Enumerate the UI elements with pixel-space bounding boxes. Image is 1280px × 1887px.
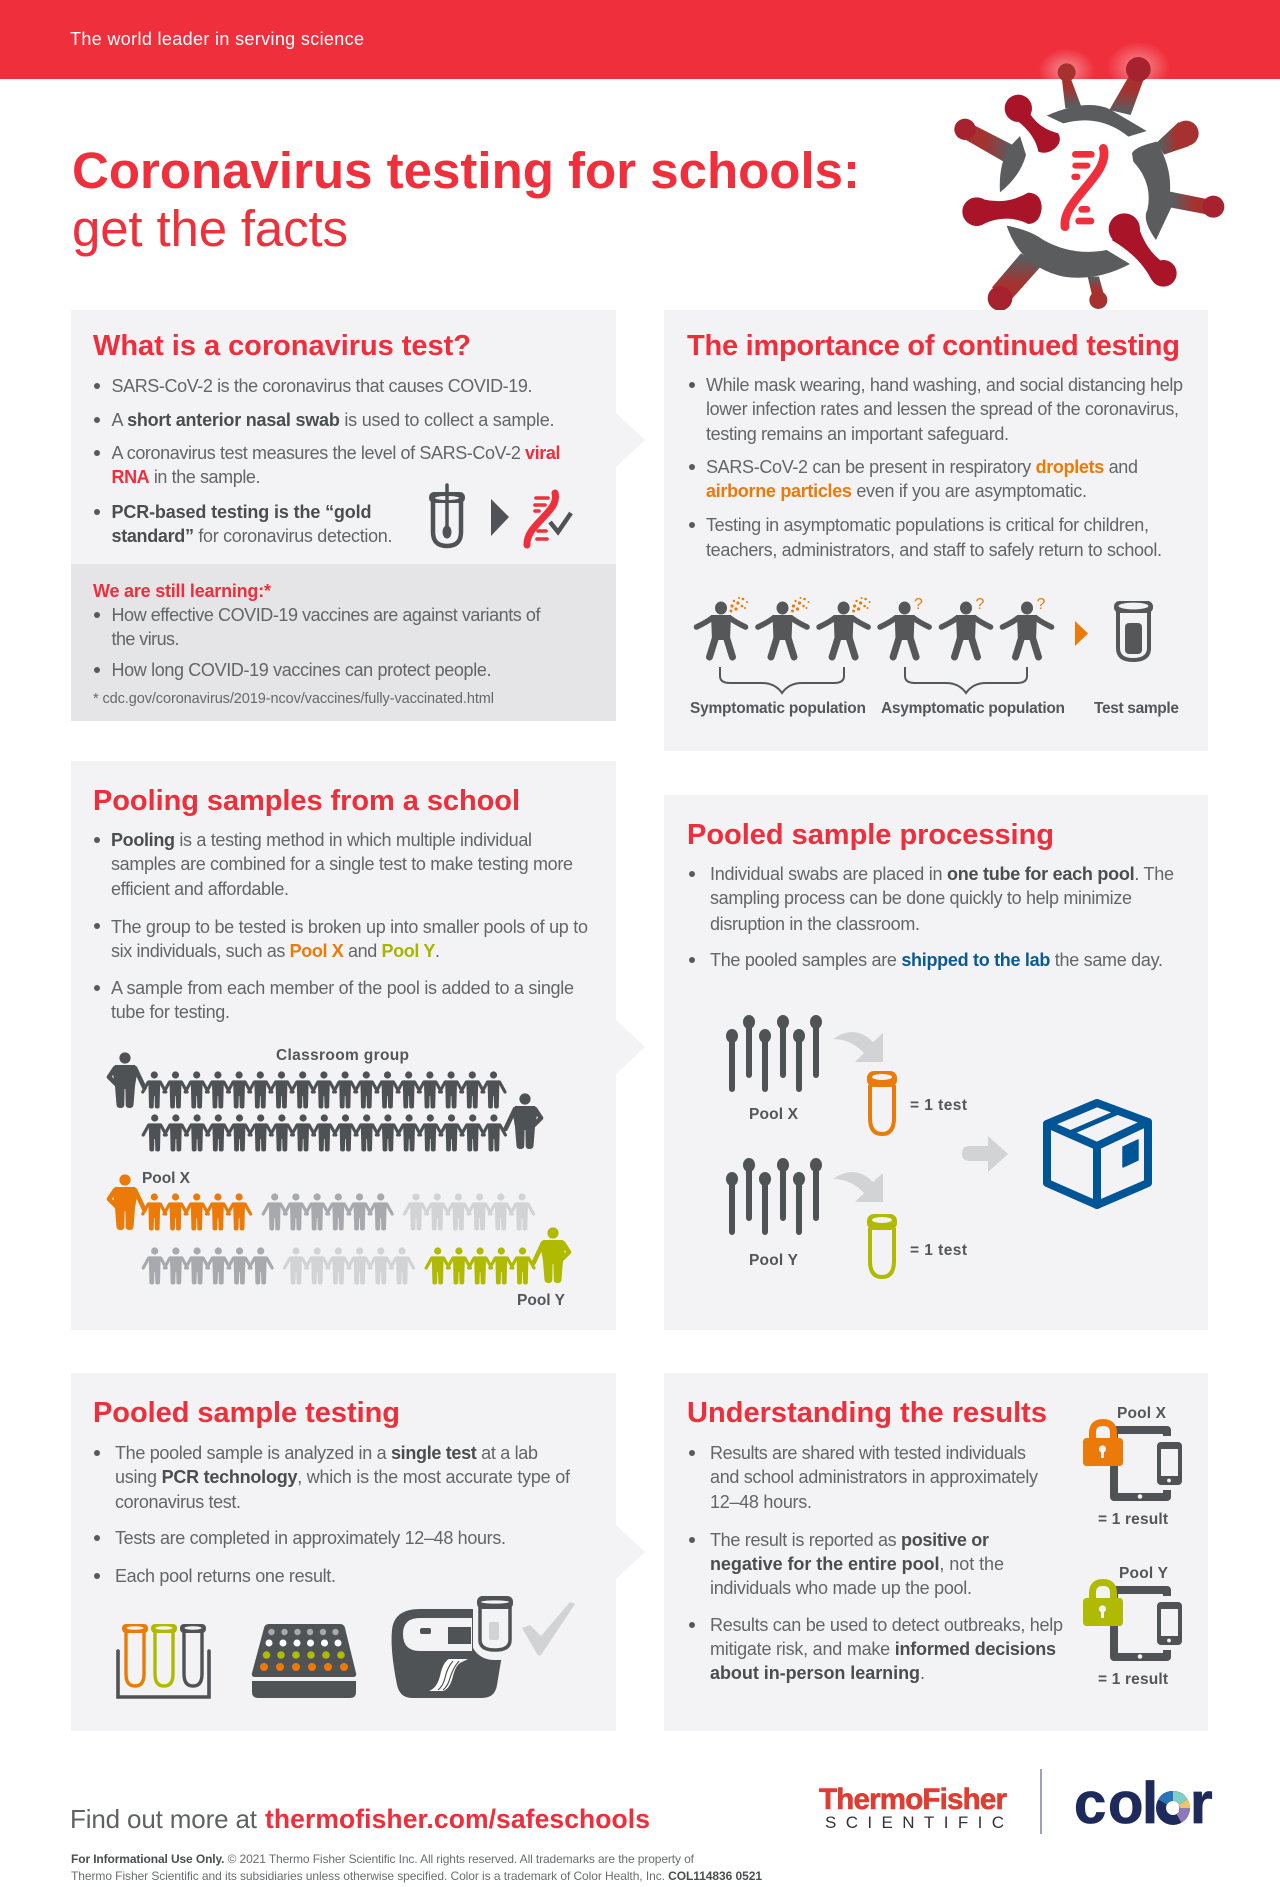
bullets: The pooled samples are shipped to the lab the same day. <box>710 950 1163 970</box>
still learning: We are still learning:* <box>93 581 271 601</box>
bullets: Tests are completed in approximately 12–48 hours. <box>115 1528 506 1548</box>
bullets: SARS-CoV-2 is the coronavirus that causes COVID-19. <box>112 376 532 396</box>
icon: check mark <box>522 1602 575 1655</box>
population labels <box>690 700 1179 717</box>
arcs <box>1047 105 1147 137</box>
bullets: 12–48 hours. <box>710 1492 812 1512</box>
bullets: RNA in the sample. <box>112 467 260 487</box>
bullets <box>94 376 560 546</box>
chart: pools: Pool X <box>142 1170 191 1187</box>
icon: pool Y result: = 1 result <box>1098 1671 1168 1688</box>
bullets: sampling process can be done quickly to help minimize <box>710 888 1132 908</box>
braces <box>720 667 1027 693</box>
bullets: about in-person learning. <box>710 1663 925 1683</box>
bullets <box>689 864 1174 970</box>
bullets: SARS-CoV-2 can be present in respiratory droplets and <box>706 457 1138 477</box>
bullets: mitigate risk, and make informed decisions <box>710 1639 1056 1659</box>
asymptomatic people: ? <box>976 596 984 613</box>
bullets: lower infection rates and lessen the spread of the coronavirus, <box>706 399 1179 419</box>
icon: test sample tube <box>1114 601 1153 660</box>
icon: swab tube to RNA check <box>429 485 571 546</box>
bullets: PCR-based testing is the “gold <box>112 502 372 522</box>
bullets: negative for the entire pool, not the <box>710 1554 1004 1574</box>
detached red spikes <box>1005 95 1032 122</box>
panel: pooled sample processing <box>664 795 1208 1330</box>
heading: The importance of continued testing <box>687 330 1180 362</box>
bullets <box>689 1443 1063 1683</box>
bullets <box>94 1443 571 1586</box>
arrow <box>962 1136 1008 1172</box>
bullets <box>689 375 1183 560</box>
bullets: A sample from each member of the pool is added to a single <box>111 978 574 998</box>
chart: classroom group <box>109 1047 541 1152</box>
bullets: While mask wearing, hand washing, and social distancing help <box>706 375 1183 395</box>
population labels: Symptomatic population <box>690 700 866 717</box>
divider <box>1040 1769 1042 1834</box>
bullets: The group to be tested is broken up into smaller pools of up to <box>111 917 588 937</box>
bullets: The pooled sample is analyzed in a single test at a lab <box>115 1443 538 1463</box>
legal text: For Informational Use Only. © 2021 Thermo Fisher Scientific Inc. All rights reserved. All trademarks are the property of <box>71 1852 695 1866</box>
bullets: Each pool returns one result. <box>115 1566 336 1586</box>
heading: What is a coronavirus test? <box>93 330 471 362</box>
bullets: disruption in the classroom. <box>710 914 920 934</box>
bullets: testing remains an important safeguard. <box>706 424 1009 444</box>
panel: importance of continued testing <box>664 310 1208 751</box>
icon: pool X result <box>1083 1405 1182 1528</box>
footer call to action <box>70 1804 650 1834</box>
asymptomatic people: ? <box>1036 596 1046 613</box>
header banner: The world leader in serving science <box>70 29 364 49</box>
icon: tube rack <box>118 1624 209 1697</box>
bullets: Results are shared with tested individuals <box>710 1443 1026 1463</box>
still learning <box>93 581 541 707</box>
heading: Understanding the results <box>687 1397 1047 1429</box>
bullets: tube for testing. <box>111 1002 230 1022</box>
bullets: Results can be used to detect outbreaks, help <box>710 1615 1063 1635</box>
still learning: * cdc.gov/coronavirus/2019-ncov/vaccines/fully-vaccinated.html <box>93 691 494 707</box>
pool Y swabs and tube <box>726 1158 967 1277</box>
panel: what is a coronavirus test <box>71 310 645 721</box>
RNA <box>1065 148 1104 227</box>
still learning: How long COVID-19 vaccines can protect people. <box>112 660 492 680</box>
bullets: standard” for coronavirus detection. <box>112 526 392 546</box>
icon: pool Y result: Pool Y <box>1119 1565 1169 1582</box>
still learning: the virus. <box>112 629 180 649</box>
bullets: samples are combined for a single test to make testing more <box>111 854 573 874</box>
panel: pooled sample testing <box>71 1373 645 1731</box>
bullets: individuals who made up the pool. <box>710 1578 972 1598</box>
icon: pool Y result <box>1083 1565 1182 1688</box>
pool Y swabs and tube: = 1 test <box>910 1242 967 1259</box>
population labels: Test sample <box>1094 700 1179 717</box>
icon: pool X result: Pool X <box>1117 1405 1167 1422</box>
orange arrow <box>1075 621 1088 646</box>
heading: Pooled sample testing <box>93 1397 400 1429</box>
panel: pooling samples from a school <box>71 761 645 1330</box>
bullets <box>94 830 588 1022</box>
pool X swabs and tube: Pool X <box>749 1106 799 1123</box>
logo: color: color <box>1074 1771 1213 1836</box>
icon: well plate <box>252 1624 356 1698</box>
panel: understanding the results <box>664 1373 1208 1731</box>
symptomatic people <box>696 597 871 657</box>
title <box>72 142 860 257</box>
bullets: six individuals, such as Pool X and Pool Y. <box>111 941 440 961</box>
bullets: A coronavirus test measures the level of SARS-CoV-2 viral <box>112 443 560 463</box>
icon: pool X result: = 1 result <box>1098 1511 1168 1528</box>
pool Y swabs and tube: Pool Y <box>749 1252 799 1269</box>
bullets: A short anterior nasal swab is used to collect a sample. <box>112 410 554 430</box>
bullets: Individual swabs are placed in one tube for each pool. The <box>710 864 1174 884</box>
heading: Pooling samples from a school <box>93 785 520 817</box>
footer call to action: thermofisher.com/safeschools <box>265 1804 650 1834</box>
still learning: How effective COVID-19 vaccines are against variants of <box>112 605 541 625</box>
chart: classroom group: Classroom group <box>276 1047 409 1064</box>
bullets: Pooling is a testing method in which multiple individual <box>111 830 532 850</box>
chart: pools <box>109 1170 569 1309</box>
logo: Thermo Fisher Scientific: ThermoFisher <box>819 1783 1008 1816</box>
header banner <box>0 0 1280 79</box>
bullets: Testing in asymptomatic populations is critical for children, <box>706 515 1149 535</box>
legal text: Thermo Fisher Scientific and its subsidiaries unless otherwise specified. Color is a trademark of Color Health, Inc. COL114836 0521 <box>71 1869 762 1883</box>
bullets: and school administrators in approximately <box>710 1467 1038 1487</box>
legal text <box>71 1852 762 1883</box>
title: Coronavirus testing for schools: <box>72 142 860 199</box>
pool X swabs and tube <box>726 1015 967 1134</box>
logo: Thermo Fisher Scientific: SCIENTIFIC <box>825 1813 1004 1832</box>
asymptomatic people: ? <box>914 596 923 613</box>
bullets: airborne particles even if you are asymptomatic. <box>706 481 1087 501</box>
footer call to action: Find out more at <box>70 1804 258 1834</box>
logo: Thermo Fisher Scientific <box>819 1783 1008 1832</box>
population labels: Asymptomatic population <box>881 700 1065 717</box>
icon: coronavirus with RNA <box>954 42 1224 311</box>
heading: Pooled sample processing <box>687 819 1054 851</box>
bullets: teachers, administrators, and staff to safely return to school. <box>706 540 1162 560</box>
asymptomatic people <box>880 596 1052 657</box>
bullets: using PCR technology, which is the most accurate type of <box>115 1467 571 1487</box>
chart: pools: Pool Y <box>517 1292 566 1309</box>
icon: PCR machine <box>392 1596 517 1698</box>
bullets: coronavirus test. <box>115 1492 241 1512</box>
pool X swabs and tube: = 1 test <box>910 1097 967 1114</box>
arms <box>1062 77 1081 108</box>
icon: shipping box <box>1047 1103 1148 1205</box>
bullets: efficient and affordable. <box>111 879 289 899</box>
title: get the facts <box>72 200 348 257</box>
bullets: The result is reported as positive or <box>710 1530 989 1550</box>
